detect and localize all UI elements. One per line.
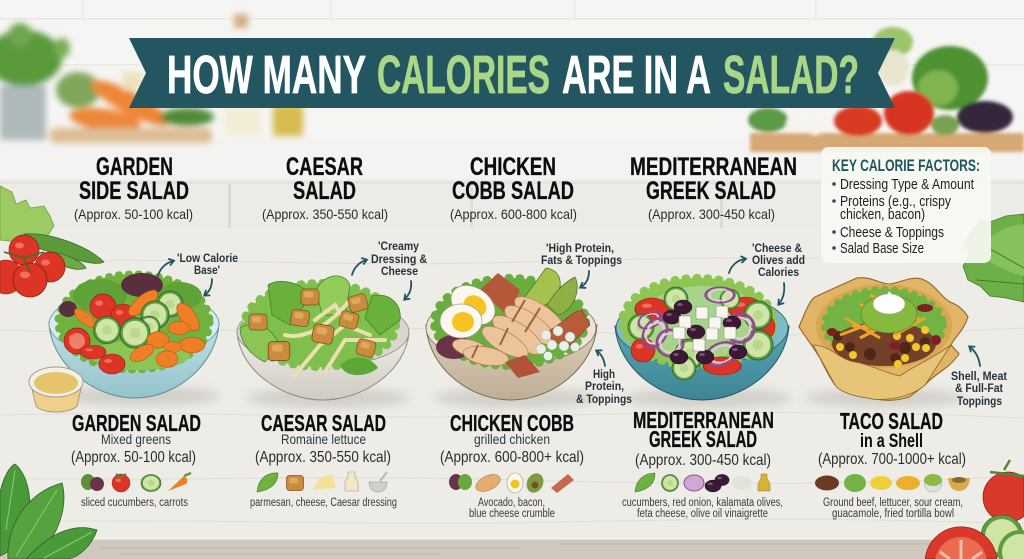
heading: mediterranean greek salad [630,153,797,222]
callout: low calorie base: Base' [194,263,220,277]
title banner: HOW MANY [167,45,366,105]
label: garden salad: GARDEN SALAD [72,410,201,436]
heading: chicken cobb salad: CHICKEN [470,153,556,181]
panel: key calorie factors: Dressing Type & Amount [840,176,975,193]
icon: dressing cup [29,367,83,412]
heading: garden side salad: SIDE SALAD [79,177,189,205]
label: caesar salad: Romaine lettuce [281,431,366,447]
heading: chicken cobb salad: COBB SALAD [452,177,574,205]
label: garden salad: (Approx. 50-100 kcal) [71,449,196,466]
label: caesar salad: CAESAR SALAD [261,410,386,436]
label: chicken cobb: grilled chicken [474,431,550,447]
callout: high protein and toppings: High [593,367,615,381]
icons: taco salad ingredients [815,474,970,492]
heading: garden side salad: (Approx. 50-100 kcal) [74,206,193,222]
heading: caesar salad: (Approx. 350-550 kcal) [262,206,388,222]
text: caesar ingredients: parmesan, cheese, Caesar dressing [250,497,397,509]
decoration: lettuce right [963,214,1024,302]
callout: high protein, fats and toppings: Fats & Toppings [541,253,622,267]
label: chicken cobb: CHICKEN COBB [450,410,574,436]
salad illustration: taco salad in a tortilla shell [799,278,968,407]
text: taco salad ingredients: guacamole, fried tortilla bowl [832,508,954,520]
label: mediterranean greek salad: (Approx. 300-450 kcal) [635,452,771,469]
callout: cheese and olives add calories: Calories [758,265,799,279]
text: chicken cobb ingredients: Avocado, bacon, [478,497,545,509]
callout: low calorie base: 'Low Calorie [177,251,238,265]
callout: cheese and olives add calories [729,241,805,304]
callout: shell, meat and full-fat toppings [951,347,1007,408]
label: caesar salad: (Approx. 350-550 kcal) [255,449,391,466]
panel: key calorie factors: Cheese & Toppings [840,224,944,241]
callout: shell, meat and full-fat toppings: Toppings [957,394,1002,408]
heading: chicken cobb salad: (Approx. 600-800 kcal) [450,206,577,222]
callout: high protein and toppings: & Toppings [576,392,632,406]
callout: cheese and olives add calories: Olives add [752,253,805,267]
callout: creamy dressing and cheese [352,239,427,299]
salad illustration: chicken cobb bowl [426,268,598,408]
label: mediterranean greek salad: MEDITERRANEAN [633,407,774,433]
heading: mediterranean greek salad: (Approx. 300-450 kcal) [648,206,775,222]
label: taco salad in a shell: (Approx. 700-1000+ kcal) [818,451,966,468]
label: mediterranean greek salad: GREEK SALAD [649,426,757,452]
callout: cheese and olives add calories: 'Cheese & [752,241,802,255]
title banner: CALORIES [377,45,550,105]
heading: caesar salad: CAESAR [286,153,363,181]
callout: shell, meat and full-fat toppings: Shell, Meat [951,369,1007,383]
icons: caesar salad ingredients [257,472,387,492]
label: taco salad in a shell: TACO SALAD [840,408,943,434]
text: chicken cobb ingredients: blue cheese crumble [469,508,555,520]
callout: creamy dressing and cheese: Cheese [381,264,418,278]
salad illustration: garden salad bowl [49,273,220,406]
decoration: tomatoes and cucumbers bottom right [925,460,1024,559]
heading: garden side salad [74,153,193,222]
icons: garden salad ingredients [81,473,191,492]
text: greek salad ingredients: cucumbers, red onion, kalamata olives, [622,497,783,509]
panel: key calorie factors: Salad Base Size [840,240,924,257]
decoration: spinach leaves bottom left [0,464,97,559]
text: greek salad ingredients [622,497,783,520]
callout: high protein and toppings [576,351,632,406]
label: mediterranean greek salad [633,407,774,469]
callout: high protein and toppings: Protein, [585,379,624,393]
callout: creamy dressing and cheese: 'Creamy [378,239,419,253]
callout: creamy dressing and cheese: Dressing & [371,252,427,266]
decoration: tomatoes, cucumbers and lettuce at left [0,186,104,297]
heading: caesar salad: SALAD [293,177,356,205]
callout: high protein, fats and toppings: 'High Protein, [546,241,614,255]
text: garden ingredients: sliced cucumbers, carrots [81,497,188,509]
heading: chicken cobb salad [450,153,577,222]
title banner: SALAD? [723,45,859,105]
label: garden salad: Mixed greens [101,431,171,447]
panel: key calorie factors: Proteins (e.g., crispy [840,193,951,210]
label: garden salad [71,410,201,466]
heading: mediterranean greek salad: GREEK SALAD [646,177,776,205]
label: chicken cobb: (Approx. 600-800+ kcal) [440,449,584,466]
label: caesar salad [255,410,391,466]
salad illustration: mediterranean greek bowl [615,278,792,408]
text: chicken cobb ingredients [469,497,555,520]
salad illustration: caesar salad bowl [237,276,410,408]
callout: high protein, fats and toppings [541,241,622,287]
label: taco salad in a shell [818,408,966,468]
icons: chicken cobb ingredients [449,471,574,495]
title banner: ARE IN A [562,45,711,105]
text: taco salad ingredients: Ground beef, lettucer, sour cream, [823,497,963,509]
heading: garden side salad: GARDEN [96,153,173,181]
heading: caesar salad [262,153,388,222]
callout: low calorie base [158,251,238,295]
panel: key calorie factors [821,147,991,263]
icons: greek salad ingredients [635,473,770,492]
panel: key calorie factors: chicken, bacon) [840,206,925,223]
text: taco salad ingredients [823,497,963,520]
title banner [129,38,895,108]
label: chicken cobb [440,410,584,466]
label: taco salad in a shell: in a Shell [860,431,923,452]
heading: mediterranean greek salad: MEDITERRANEAN [630,153,797,181]
callout: shell, meat and full-fat toppings: & Full-Fat [955,381,1003,395]
text: greek salad ingredients: feta cheese, olive oil vinaigrette [637,508,768,520]
